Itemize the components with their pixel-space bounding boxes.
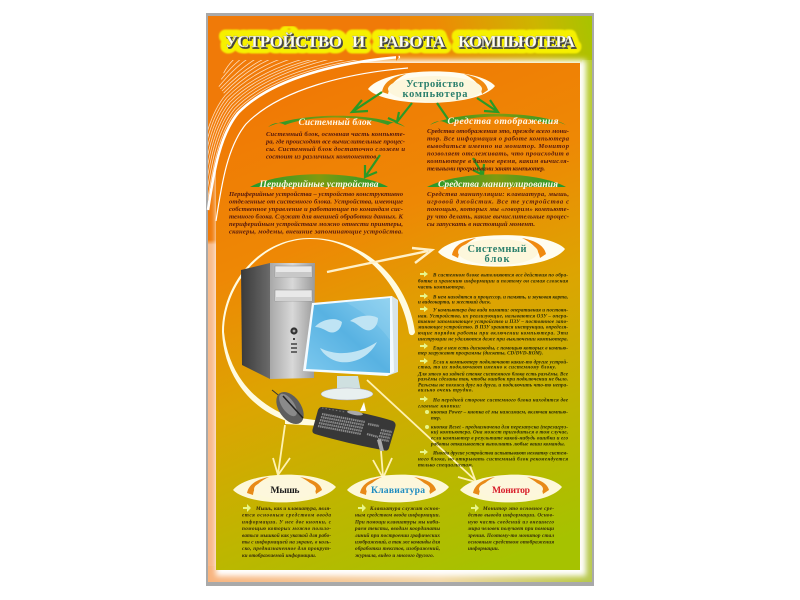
text: system block details: В нем находятся и процессор, и память, и звуковая карта, <box>432 294 568 300</box>
text: system block details: минающее устройство. В ПЗУ хранятся инструкции, определя- <box>417 324 568 330</box>
section: mouse <box>233 475 336 559</box>
text: system block details: ки) компьютера. Она может пригодиться в том случае, <box>431 428 568 436</box>
text: manipulation devices: Средства манипуляции: клавиатура, мышь, <box>427 191 569 198</box>
green arrows from main node <box>352 92 498 177</box>
text: display devices <box>427 128 570 172</box>
main node: computer device: Устройство <box>406 79 464 90</box>
text: system block details: тивное запоминающее устройство и ПЗУ – постоянное запо- <box>418 318 568 325</box>
text: mouse <box>242 506 332 559</box>
text: keyboard <box>354 506 440 559</box>
text: system block: сы. Системный блок достаточно сложен и <box>266 146 405 153</box>
title: КОМПЬЮТЕРА <box>458 32 576 51</box>
text: system block: ра, где происходят все вычислительные процес- <box>265 138 405 146</box>
text: system block: состоит из различных компонентов. <box>266 154 378 160</box>
title <box>225 32 577 52</box>
text: display devices: позволяет отслеживать, что происходит в <box>427 150 569 158</box>
heading: system block <box>268 116 405 128</box>
text: system block details <box>417 272 569 468</box>
node: system block: Системный <box>468 244 526 255</box>
text: keyboard: При помощи клавиатуры мы наби- <box>354 518 440 526</box>
text: monitor: дство вывода информации. Основ- <box>468 512 554 518</box>
title: УСТРОЙСТВО <box>225 32 342 51</box>
text: mouse: ско, предназначенное для прокрут- <box>242 545 331 552</box>
title: РАБОТА <box>378 32 446 51</box>
title: РАБОТА <box>378 32 446 51</box>
decorative stripes and swoosh <box>195 49 408 221</box>
section: display devices <box>427 114 570 172</box>
text: system block details: разъёмы сделаны так, чтобы ошибок при подключении не было. <box>417 376 568 382</box>
text: system block details: и видеокарта, и жесткий диск. <box>418 298 491 306</box>
smiley face <box>315 316 378 362</box>
arrow: to system block <box>327 248 432 272</box>
text: system block details: ботке и хранению информации и поэтому он самая сложная <box>418 278 568 284</box>
text: system block details: часть компьютера. <box>418 284 465 290</box>
text: system block details: У компьютера два вида памяти: оперативная и постоян- <box>433 306 568 314</box>
text: monitor: ную часть сведений из внешнего <box>468 518 554 526</box>
text: system block details: только специалистам. <box>418 462 473 468</box>
title: КОМПЬЮТЕРА <box>458 32 576 51</box>
text: keyboard: раем тексты, вводим координаты <box>354 525 440 532</box>
text: peripheral devices: собственное управление и работающие по командам сис- <box>229 206 403 213</box>
text: keyboard: линий при построении графических <box>354 532 440 539</box>
heading: manipulation devices: Средства манипулирования <box>438 179 558 190</box>
title: КОМПЬЮТЕРА <box>459 33 577 52</box>
heading: display devices: Средства отображения <box>448 116 559 127</box>
text: system block details: ная. Устройства, их реализующие, называются ОЗУ – опера- <box>418 312 568 320</box>
main node: computer device: компьютера <box>402 89 468 100</box>
computer illustration <box>241 263 398 451</box>
text: system block details: вильно очень трудно. <box>418 386 473 394</box>
text: display devices: выводиться именно на монитор. Монитор <box>427 143 570 150</box>
text: system block details: работы отказывается выполнять любые ваши команды. <box>430 440 565 448</box>
text: system block details: ющие порядок работы при включении компьютера. Эти <box>418 330 568 336</box>
title: УСТРОЙСТВО <box>225 32 342 51</box>
node: keyboard: Клавиатура <box>371 485 425 496</box>
text: mouse: ваться мышкой как указкой для рабо- <box>242 532 331 539</box>
text: manipulation devices: ру что делать, какие вычислительные процес- <box>426 214 569 220</box>
bullets <box>420 271 429 455</box>
text: mouse: ется основным средством ввода <box>242 512 331 518</box>
node: system block: блок <box>484 254 510 265</box>
text: system block details: ства, то их подключают именно к системному блоку. <box>418 364 556 370</box>
text: system block details: В системном блоке выполняются все действия по обра- <box>432 272 568 278</box>
heading: system block: Системный блок <box>298 117 373 128</box>
arrow: to mouse <box>273 425 290 475</box>
text: system block details: инструкции не удаляются даже при выключении компьютера. <box>418 336 568 342</box>
text: mouse: информации. У нее две кнопки, с <box>242 518 332 526</box>
title: И <box>353 33 367 52</box>
title: И <box>352 32 365 51</box>
text: system block details: Если к компьютеру подключают какие-то другие устрой- <box>432 358 568 366</box>
circular arc around computer <box>222 238 415 426</box>
text: system block details: тер загружают программы (дискеты, CD/DVD-ROM). <box>418 350 543 356</box>
node: system block <box>438 235 565 267</box>
section: system block details <box>417 235 569 468</box>
text: monitor: основным средством отображения <box>468 538 554 546</box>
heading: peripheral devices <box>250 174 388 190</box>
text: peripheral devices: Периферийные устройства – устройство конструктивно <box>228 191 404 198</box>
text: system block details: Для этого на задней стенке системного блока есть разъёмы. Все <box>417 370 569 378</box>
text: monitor: мира человек получает при помощи <box>467 526 554 532</box>
text: monitor <box>467 506 554 552</box>
text: manipulation devices: игровой джойстик. Все те устройства с <box>427 198 569 206</box>
text: keyboard: обработки текстов, изображений, <box>355 545 440 552</box>
text: peripheral devices: отделенные от системного блока. Устройства, имеющие <box>229 198 403 206</box>
heading: peripheral devices: Периферийные устройства <box>258 179 379 190</box>
text: mouse: ки отображаемой информации. <box>242 552 316 559</box>
text: keyboard: журнала, видео и многого другого. <box>355 552 434 559</box>
text: system block details: кнопка Power – кнопка её мы нажимаем, включая компью- <box>431 410 568 416</box>
monitor <box>303 296 398 400</box>
text: system block details: Иногда другие устройства испытывают нехватку систем- <box>432 450 568 456</box>
system unit <box>241 263 315 379</box>
text: keyboard: ным средством ввода информации. <box>355 512 440 518</box>
node: mouse: Мышь <box>270 485 300 496</box>
text: system block details: Разъемы не похожи друг на друга, и подключить что-то непра- <box>418 382 568 388</box>
section: manipulation devices <box>426 174 569 228</box>
text: peripheral devices <box>228 191 404 236</box>
text: peripheral devices: темного блока. Служат для внешней обработки данных. К <box>229 214 404 220</box>
text: display devices: тельными программами занят компьютер. <box>427 166 545 172</box>
section: monitor <box>460 475 562 552</box>
section: keyboard <box>347 475 449 559</box>
section: system block <box>265 116 405 160</box>
heading: display devices <box>430 114 566 127</box>
text: peripheral devices: периферийным устройствам можно отнести принтеры, <box>229 221 403 228</box>
text: system block details: Еще в нем есть дисководы, с помощью которых в компью- <box>432 344 568 352</box>
text: keyboard: изображений, а так же команды для <box>355 538 440 546</box>
bullet <box>471 504 479 512</box>
section: peripheral devices <box>228 174 404 236</box>
arrow: to monitor <box>367 380 476 482</box>
title: И <box>352 32 365 51</box>
text: system block details: ного блока, но открывать системный блок рекомендуется <box>418 456 568 462</box>
text: system block <box>265 131 405 160</box>
text: display devices: Средства отображения это, прежде всего мони- <box>427 128 569 135</box>
text: mouse: ты с информацией на экране, в коль- <box>242 538 331 546</box>
node: monitor: Монитор <box>492 485 530 496</box>
text: display devices: компьютере в данное время, каким вычисля- <box>427 158 569 165</box>
text: system block details: кнопка Reset - предназначена для перезапуска (перезагруз- <box>431 424 568 430</box>
title: РАБОТА <box>379 33 447 52</box>
bullet <box>243 504 251 512</box>
arrow: to keyboard <box>373 451 392 478</box>
text: keyboard: Клавиатура служит основ- <box>369 506 440 512</box>
text: monitor: Монитор это основное сре- <box>482 506 554 512</box>
text: system block details: тер. <box>431 416 441 422</box>
title: УСТРОЙСТВО <box>226 33 343 52</box>
text: manipulation devices: сы запускать в настоящий момент. <box>427 221 535 228</box>
text: manipulation devices: помощью, которых мы «говорим» компьюте- <box>427 206 569 213</box>
text: display devices: тор. Все информация о работе компьютера <box>427 136 570 142</box>
text: manipulation devices <box>426 191 569 228</box>
text: system block details: главные кнопки: <box>418 404 461 410</box>
mouse <box>271 387 309 429</box>
text: mouse: Мышь, как и клавиатура, явля- <box>255 506 331 512</box>
text: system block details: если компьютер в результате какой-нибудь ошибки и его <box>431 434 568 442</box>
text: mouse: помощью которых можно пользо- <box>242 526 331 532</box>
heading: manipulation devices <box>427 174 566 190</box>
text: monitor: информации. <box>468 545 499 552</box>
text: system block: Системный блок, основная часть компьюте- <box>266 131 405 138</box>
keyboard <box>312 402 396 451</box>
main node: computer device <box>368 71 495 103</box>
text: peripheral devices: сканеры, модемы, внешние запоминающие устройства. <box>229 228 403 236</box>
bullet <box>358 504 366 512</box>
poster frame <box>206 13 594 586</box>
main gradient panel <box>208 16 580 570</box>
text: system block details: На передней стороне системного блока находятся две <box>432 396 569 404</box>
text: monitor: зрения. Поэтому-то монитор стал <box>467 533 554 539</box>
